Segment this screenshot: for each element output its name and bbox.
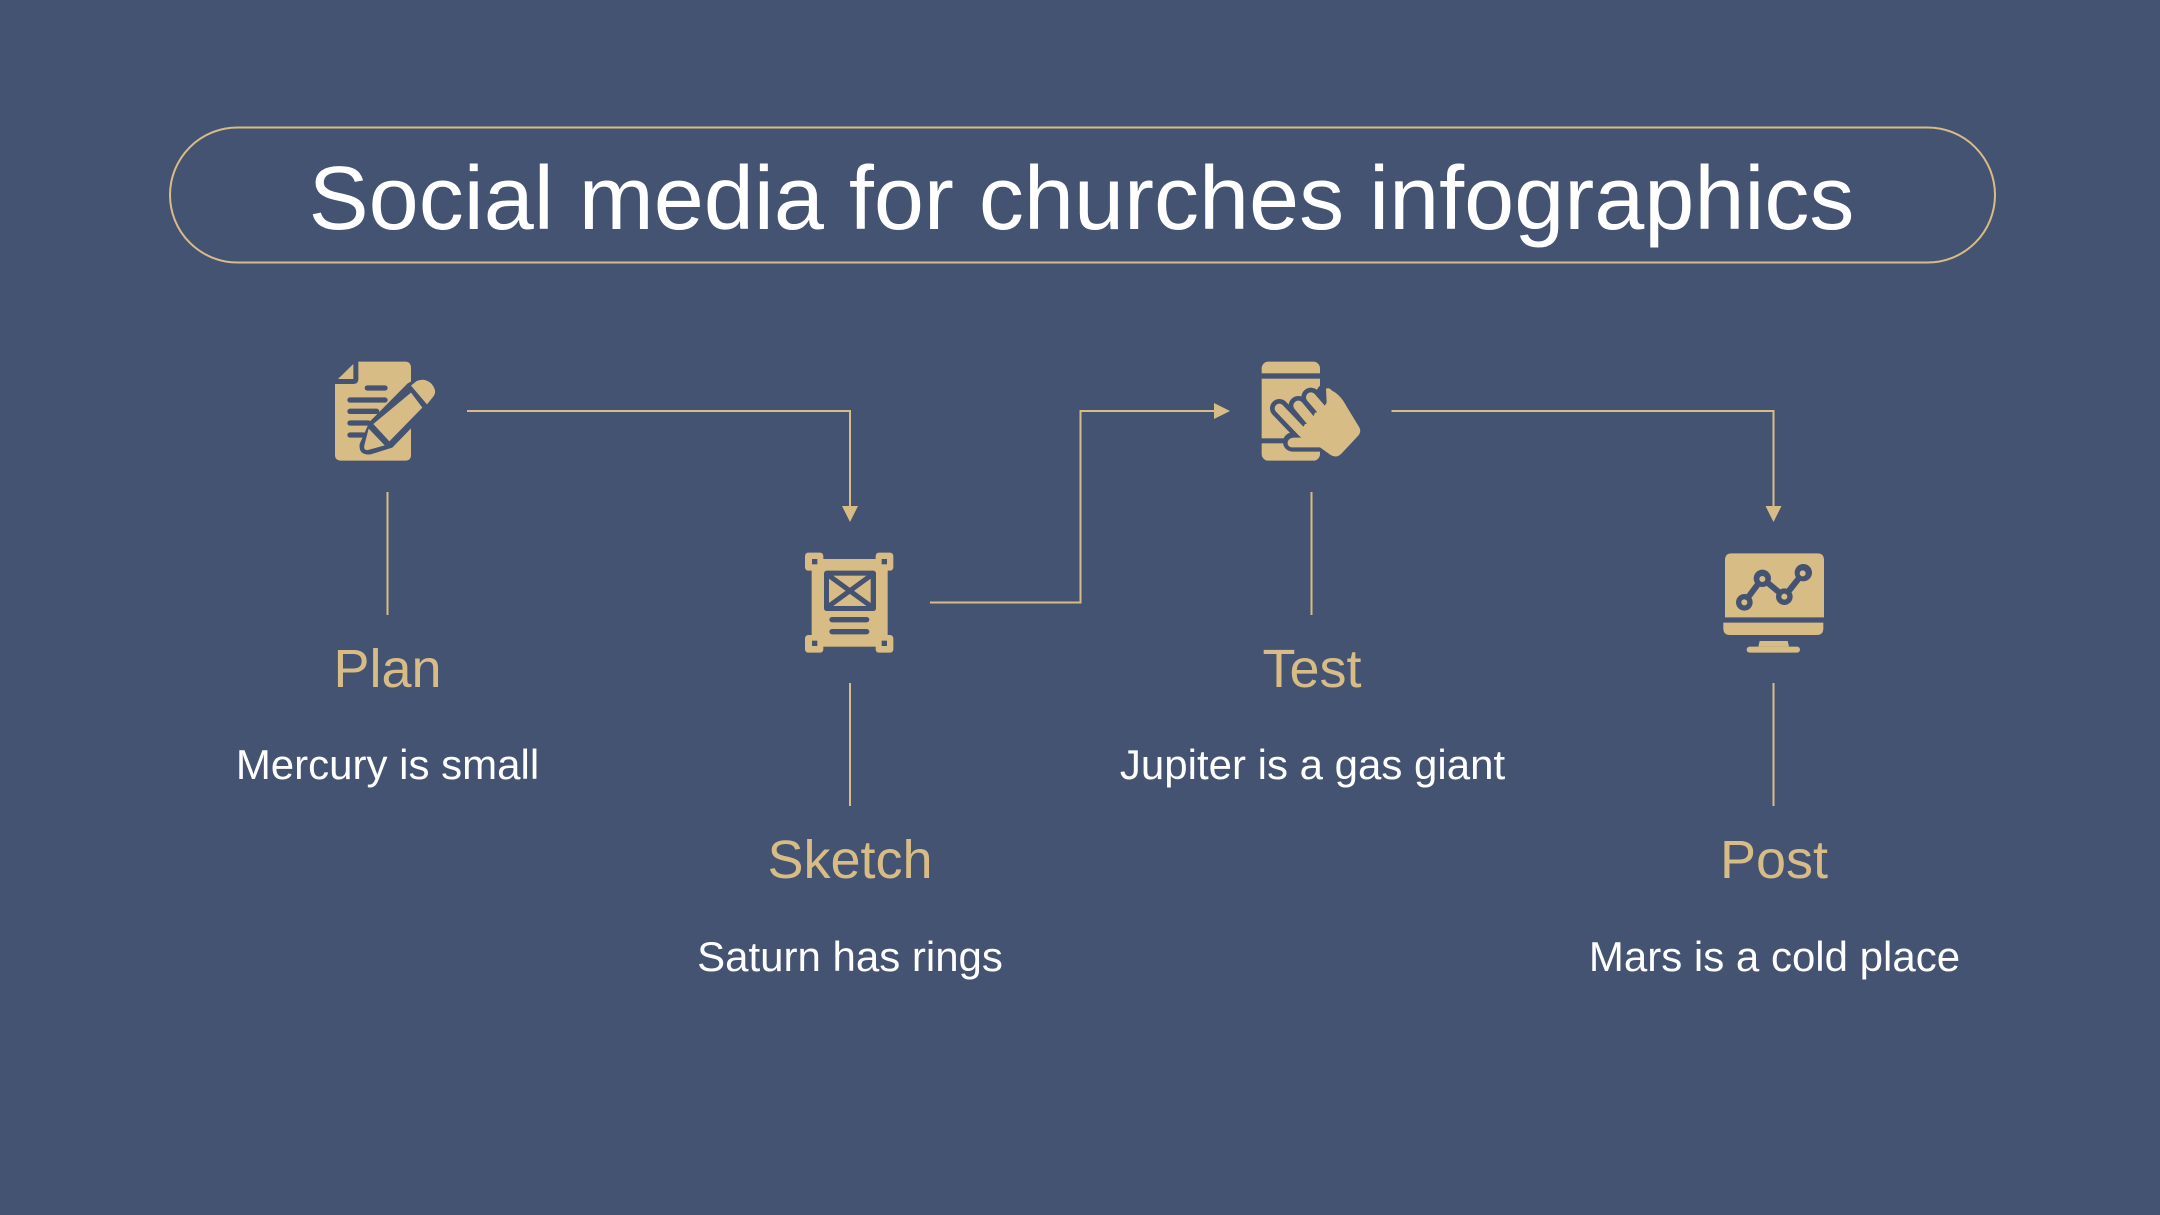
title	[170, 128, 1995, 262]
panel: post	[1589, 553, 1960, 980]
heading: post: Post	[1720, 830, 1828, 890]
heading: test: Test	[1262, 639, 1362, 699]
icon: wireframe sheet	[805, 553, 893, 653]
text: plan description: Mercury is small	[236, 741, 539, 788]
text: sketch description: Saturn has rings	[697, 933, 1003, 980]
title: Social media for churches infographics	[309, 149, 1854, 249]
heading: sketch: Sketch	[767, 830, 933, 890]
arrow: plan to sketch	[467, 411, 858, 522]
connector line	[1310, 492, 1312, 615]
heading: plan: Plan	[333, 639, 442, 699]
connector line	[849, 683, 851, 806]
text: post description: Mars is a cold place	[1589, 933, 1960, 980]
icon: document and pencil	[335, 362, 438, 461]
arrow: sketch to test	[930, 403, 1230, 602]
icon: hand tapping phone	[1260, 362, 1360, 461]
connector line	[1772, 683, 1774, 806]
connector line	[386, 492, 388, 615]
panel: test	[1120, 362, 1505, 788]
panel: sketch	[697, 553, 1003, 980]
arrow: test to post	[1392, 411, 1782, 522]
icon: monitor with line chart	[1723, 553, 1824, 653]
panel: plan	[236, 362, 539, 788]
text: test description: Jupiter is a gas giant	[1120, 741, 1505, 788]
